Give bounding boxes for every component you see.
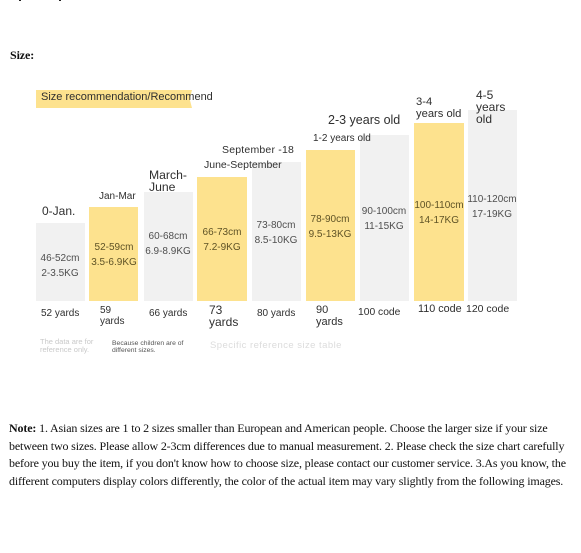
- measurements: 73 yards: 7.2-9KG: [203, 242, 241, 252]
- measurements: 52 yards: 2-3.5KG: [41, 268, 79, 278]
- bar: 0-Jan: [36, 223, 85, 301]
- banner: size recommendation: [36, 90, 192, 108]
- size label: 59 yards: [100, 305, 124, 326]
- age label: March-June: [149, 168, 187, 194]
- footnote: data for reference: reference only.: [40, 344, 89, 354]
- bar: September-18: [252, 162, 301, 301]
- size label: 73 yards: [209, 303, 238, 328]
- measurements: 80 yards: 73-80cm: [257, 220, 295, 231]
- bar: 1-2 years: [306, 150, 355, 301]
- age label: March-June: June: [149, 180, 175, 194]
- footnote: children sizes: different sizes.: [112, 347, 156, 354]
- footnote: children sizes: Because children are of: [112, 340, 183, 347]
- note text block: before you buy the item, if you don't know how to choose size, please contact our customer service. 3.As you know, the: [9, 456, 566, 470]
- note text block: different computers display colors differently, the color of the actual item may vary slightly from the following images.: [9, 474, 563, 488]
- bar: 2-3 years: [360, 135, 409, 301]
- footnote: data for reference: The data are for: [40, 337, 93, 346]
- size label: 59 yards: 59: [100, 305, 111, 316]
- measurements: 59 yards: 3.5-6.9KG: [91, 256, 137, 268]
- measurements: 73 yards: 66-73cm: [203, 227, 241, 238]
- bar: March-June: [144, 192, 193, 301]
- age label: Jan-Mar: Jan-Mar: [99, 191, 136, 202]
- size label: 90 yards: [316, 304, 343, 328]
- measurements: 120 code: 17-19KG: [472, 208, 512, 220]
- banner label: Size recommendation/Recommend: [41, 91, 213, 103]
- measurements: 66 yards: 6.9-8.9KG: [145, 246, 191, 256]
- size label: 90 yards: yards: [316, 316, 343, 328]
- age label: 4-5 years old: 4-5: [476, 88, 493, 102]
- age label: 3-4 years old: years old: [416, 108, 461, 120]
- footnote: data for reference: [40, 337, 94, 354]
- bar: Jan-Mar: [89, 207, 138, 301]
- measurements: 59 yards: [91, 242, 137, 268]
- measurements: 120 code: 110-120cm: [467, 194, 517, 205]
- measurements: 90 yards: [309, 214, 351, 240]
- age label: 4-5 years old: years: [476, 100, 505, 114]
- size label: 59 yards: yards: [100, 316, 124, 326]
- clipped text descenders at the top edge: [19, 0, 61, 1]
- size label: 73 yards: 73: [209, 303, 222, 317]
- measurements: 80 yards: [255, 220, 297, 246]
- size label: 120 code: 120 code: [466, 303, 509, 315]
- measurements: 66 yards: 60-68cm: [149, 231, 187, 242]
- measurements: 100 code: 11-15KG: [364, 220, 404, 232]
- measurements: 52 yards: [40, 253, 79, 278]
- measurements: 120 code: [467, 194, 517, 220]
- measurements: 66 yards: [145, 231, 191, 256]
- measurements: 110 code: [414, 200, 464, 226]
- heading: size: Size:: [10, 48, 34, 62]
- bar: 3-4 years: [414, 122, 464, 301]
- note text block: between two sizes. Please allow 2-3cm differences due to manual measurement. 2. Please check the size chart carefully: [9, 438, 564, 452]
- age label: 4-5 years old: old: [476, 112, 492, 126]
- size label: 110 code: 110 code: [418, 303, 462, 315]
- size label: 80 yards: 80 yards: [257, 308, 295, 319]
- caption: specific reference size table: Specific reference size table: [210, 340, 342, 351]
- age label: 1-2 years old: 1-2 years old: [313, 133, 371, 144]
- age label: 3-4 years old: [416, 96, 461, 120]
- footnote: children sizes: [112, 340, 184, 354]
- note text block: [9, 421, 566, 488]
- age label: June-September: June-September: [204, 159, 282, 171]
- measurements: 80 yards: 8.5-10KG: [255, 234, 297, 246]
- age label: 2-3 years old: 2-3 years old: [328, 113, 400, 127]
- measurements: 110 code: 14-17KG: [419, 214, 459, 226]
- measurements: 100 code: 90-100cm: [362, 206, 406, 217]
- measurements: 90 yards: 9.5-13KG: [309, 228, 351, 240]
- note text block: Note: 1. Asian sizes are 1 to 2 sizes smaller than European and American people. Choose the larger size if your size: [9, 421, 548, 435]
- age label: 3-4 years old: 3-4: [416, 96, 432, 108]
- size label: 90 yards: 90: [316, 304, 328, 316]
- age label: 4-5 years old: [476, 88, 505, 126]
- measurements: 90 yards: 78-90cm: [311, 214, 349, 225]
- measurements: 59 yards: 52-59cm: [95, 242, 133, 253]
- bar: 4-5 years: [468, 110, 517, 301]
- measurements: 73 yards: [203, 227, 241, 252]
- age label: September -18: September -18: [222, 144, 294, 156]
- measurements: 52 yards: 46-52cm: [41, 253, 79, 264]
- bar: June-September: [197, 177, 246, 301]
- measurements: 110 code: 100-110cm: [414, 200, 464, 211]
- size label: 73 yards: yards: [209, 314, 238, 328]
- age label: 0-Jan: 0-Jan.: [42, 204, 75, 218]
- size label: 52 yards: 52 yards: [41, 308, 79, 319]
- measurements: 100 code: [362, 206, 406, 232]
- age label: March-June: March-: [149, 168, 187, 182]
- size label: 100 code: 100 code: [358, 307, 400, 318]
- size label: 66 yards: 66 yards: [149, 308, 187, 319]
